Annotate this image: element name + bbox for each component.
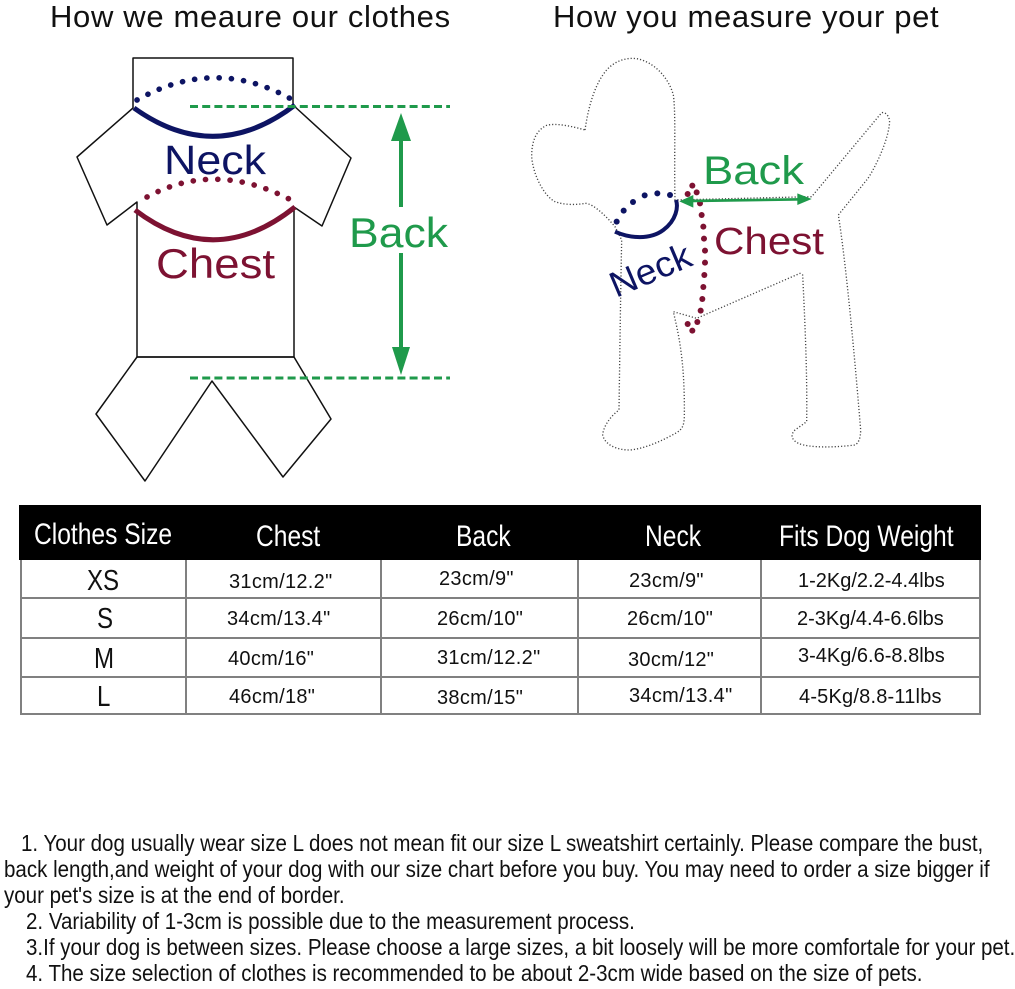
diagrams	[76, 57, 890, 482]
row M: M	[94, 643, 114, 675]
table grid	[20, 560, 981, 715]
row L: 38cm/15"	[437, 687, 523, 709]
row S	[97, 603, 944, 635]
size table: Back	[456, 520, 511, 553]
chest markings	[135, 179, 295, 240]
row XS	[87, 565, 945, 597]
pet label: neck: Neck	[603, 234, 698, 305]
row XS: XS	[87, 565, 119, 597]
row S: 26cm/10"	[627, 608, 713, 630]
row XS: 23cm/9"	[629, 570, 704, 592]
note 1: 1. Your dog usually wear size L does not mean fit our size L sweatshirt certainly. Please compare the bust,	[21, 830, 983, 856]
row XS: 23cm/9"	[439, 568, 514, 590]
row L: 34cm/13.4"	[629, 685, 732, 707]
row L: L	[97, 681, 110, 713]
row M: 31cm/12.2"	[437, 647, 540, 669]
label: neck: Neck	[164, 137, 267, 183]
note 1 line 2: back length,and weight of your dog with our size chart before you buy. You may need to order a size bigger if	[4, 856, 990, 882]
note 2: 2. Variability of 1-3cm is possible due to the measurement process.	[26, 908, 635, 934]
row L	[97, 681, 942, 713]
size table	[19, 505, 981, 715]
note 4: 4. The size selection of clothes is recommended to be about 2-3cm wide based on the size of pets.	[26, 960, 922, 986]
row M: 3-4Kg/6.6-8.8lbs	[798, 645, 945, 667]
heading: how you measure your pet: How you measure your pet	[553, 0, 939, 34]
size table: Fits Dog Weight	[779, 520, 954, 553]
sizing notes	[4, 830, 1015, 986]
pet neck marking	[614, 190, 677, 237]
row S: S	[97, 603, 113, 635]
pet label: back: Back	[703, 149, 805, 193]
clothes outline	[77, 58, 351, 481]
row L: 46cm/18"	[229, 686, 315, 708]
row S: 26cm/10"	[437, 608, 523, 630]
back measurement guides	[190, 106, 450, 378]
pet back arrow	[679, 193, 812, 208]
dog outline	[532, 58, 890, 450]
pet chest marking	[685, 183, 708, 334]
row M: 40cm/16"	[228, 648, 314, 670]
note 3: 3.If your dog is between sizes. Please choose a large sizes, a bit loosely will be more comfortale for your pet.	[26, 934, 1015, 960]
row L: 4-5Kg/8.8-11lbs	[799, 686, 942, 708]
label: back: Back	[349, 209, 449, 256]
row S: 34cm/13.4"	[227, 608, 330, 630]
table header	[19, 505, 981, 560]
row S: 2-3Kg/4.4-6.6lbs	[797, 608, 944, 630]
heading: how we measure our clothes: How we meaure our clothes	[50, 0, 451, 34]
note 1 line 3: your pet's size is at the end of border.	[4, 882, 345, 908]
size table: Chest	[256, 520, 320, 553]
label: chest: Chest	[156, 240, 275, 287]
header labels: Clothes Size	[34, 518, 172, 551]
size table: Neck	[645, 520, 701, 553]
row XS: 1-2Kg/2.2-4.4lbs	[798, 570, 945, 592]
row M: 30cm/12"	[628, 649, 714, 671]
row M	[94, 643, 945, 675]
row XS: 31cm/12.2"	[229, 571, 332, 593]
neck markings	[134, 78, 295, 136]
pet label: chest: Chest	[714, 221, 824, 263]
